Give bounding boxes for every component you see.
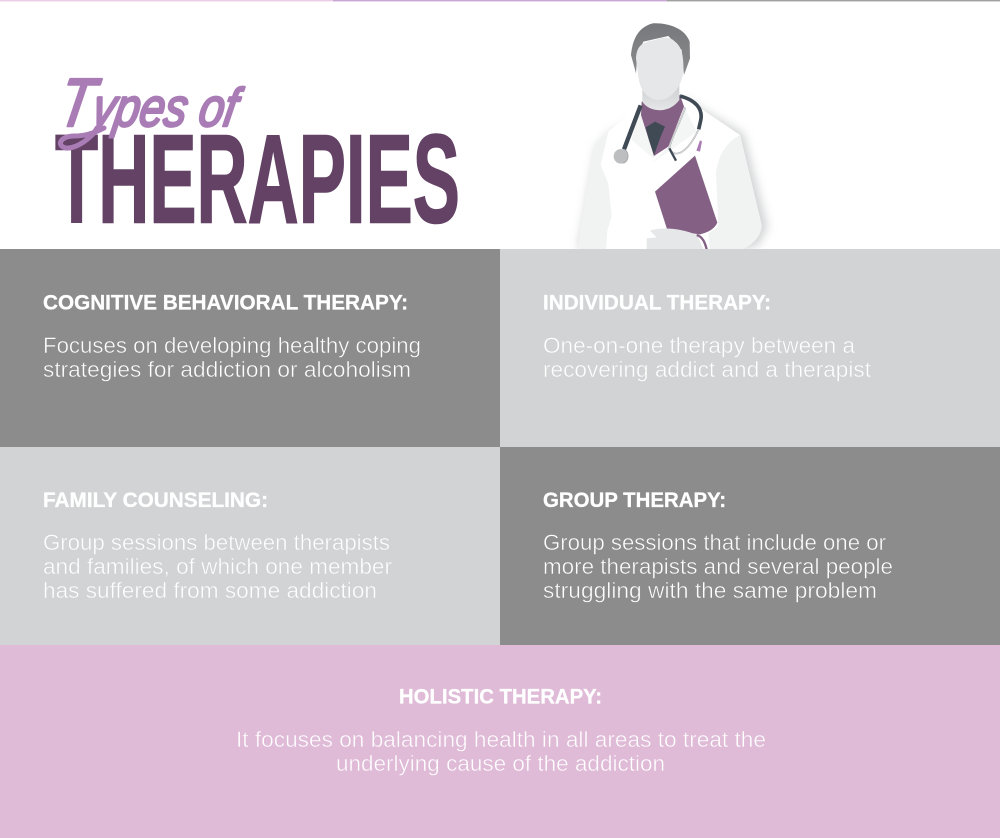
title bbox=[53, 64, 460, 249]
face bbox=[636, 38, 683, 100]
panel: family counseling bbox=[0, 447, 500, 645]
wristband bbox=[697, 235, 707, 249]
icon: doctor illustration bbox=[578, 23, 767, 249]
hair bbox=[631, 23, 690, 75]
body text bbox=[543, 530, 893, 603]
body text bbox=[543, 333, 871, 382]
body text: Group sessions between therapists bbox=[43, 530, 390, 555]
panel: group therapy bbox=[500, 447, 1000, 645]
heading: HOLISTIC THERAPY: bbox=[399, 686, 602, 708]
body text: strategies for addiction or alcoholism bbox=[43, 357, 411, 382]
stethoscope bbox=[614, 96, 701, 164]
doctor shadow bbox=[578, 98, 767, 249]
body text: Focuses on developing healthy coping bbox=[43, 333, 421, 358]
body text: recovering addict and a therapist bbox=[543, 357, 871, 382]
body text bbox=[43, 530, 392, 603]
body text: has suffered from some addiction bbox=[43, 578, 377, 603]
left sleeve bbox=[578, 132, 612, 249]
heading: GROUP THERAPY: bbox=[543, 489, 726, 512]
title: Types of: Types of bbox=[53, 64, 249, 141]
panel: holistic therapy bbox=[0, 645, 1000, 838]
body text: underlying cause of the addiction bbox=[336, 751, 665, 776]
right sleeve bbox=[708, 135, 762, 249]
body text: more therapists and several people bbox=[543, 554, 893, 579]
tie bbox=[646, 122, 665, 155]
panel: individual therapy bbox=[500, 249, 1000, 447]
hand bbox=[647, 229, 703, 249]
body text: Group sessions that include one or bbox=[543, 530, 886, 555]
body text: One-on-one therapy between a bbox=[543, 333, 856, 358]
heading: INDIVIDUAL THERAPY: bbox=[543, 292, 771, 314]
heading: FAMILY COUNSELING: bbox=[43, 489, 268, 512]
heading: COGNITIVE BEHAVIORAL THERAPY: bbox=[43, 292, 408, 314]
panel: cognitive behavioral therapy bbox=[0, 249, 500, 447]
top colour bar bbox=[0, 0, 1000, 1]
lapels bbox=[632, 105, 697, 163]
coat bbox=[578, 97, 762, 249]
body text: struggling with the same problem bbox=[543, 578, 877, 603]
body text: and families, of which one member bbox=[43, 554, 392, 579]
body text bbox=[236, 727, 766, 776]
body text: It focuses on balancing health in all areas to treat the bbox=[236, 727, 766, 752]
pen bbox=[696, 140, 702, 152]
body text bbox=[43, 333, 421, 382]
shirt bbox=[641, 95, 684, 156]
neck bbox=[642, 83, 679, 110]
title: Therapies: THERAPIES bbox=[55, 108, 460, 249]
clipboard bbox=[655, 156, 717, 234]
